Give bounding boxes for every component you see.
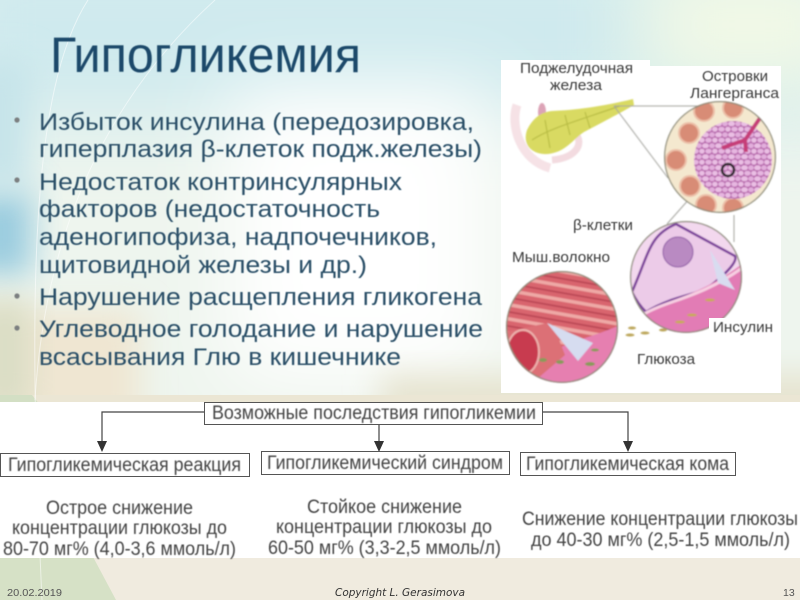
box: heading: Возможные последствия гипогликемии	[212, 403, 536, 424]
bullet 4	[39, 316, 483, 371]
image labels	[512, 61, 780, 368]
footer copyright: Copyright L. Gerasimova	[335, 586, 465, 599]
bullet 2: аденогипофиза, надпочечников,	[39, 224, 437, 251]
bullet markers	[14, 117, 20, 331]
text: persistent decrease: Стойкое снижение	[307, 497, 462, 518]
image labels: Островки	[702, 69, 768, 85]
image labels: β-клетки	[573, 218, 633, 234]
image labels: Поджелудочная	[520, 61, 633, 77]
bullet 1: гиперплазия β-клеток подж.железы)	[39, 136, 482, 163]
connector lines	[614, 106, 734, 242]
label: insulin background	[709, 318, 777, 338]
bullet 2	[39, 169, 437, 279]
text: persistent decrease: концентрации глюкозы до	[276, 517, 492, 538]
text: glucose decrease: до 40-30 мг% (2,5-1,5 ммоль/л)	[531, 530, 790, 551]
footer page number: 13	[783, 587, 795, 599]
bullet 2: факторов (недостаточность	[39, 196, 380, 223]
image labels: Инсулин	[713, 320, 773, 336]
bullet 3: Нарушение расщепления гликогена	[39, 284, 482, 311]
text: acute decrease: Острое снижение	[46, 498, 193, 519]
arrows	[102, 412, 628, 441]
text: acute decrease	[3, 498, 236, 560]
title: Гипогликемия	[50, 27, 361, 83]
circle: islets of Langerhans	[664, 98, 776, 218]
footer date: 20.02.2019	[7, 587, 62, 599]
glucose particles	[626, 326, 667, 336]
text: persistent decrease	[268, 497, 501, 559]
text: persistent decrease: 60-50 мг% (3,3-2,5 ммоль/л)	[268, 538, 501, 559]
bullet 1	[39, 109, 482, 163]
text: acute decrease: 80-70 мг% (4,0-3,6 ммоль/л)	[3, 539, 236, 560]
image labels: Лангерганса	[690, 86, 780, 102]
box: syndrome: Гипогликемический синдром	[267, 453, 503, 474]
bullet 2: Недостаток контринсулярных	[39, 169, 402, 196]
box: coma: Гипогликемическая кома	[526, 454, 729, 475]
image labels: Мыш.волокно	[512, 250, 610, 266]
diagram background	[0, 402, 800, 558]
image labels: Глюкоза	[637, 352, 696, 368]
image background	[501, 60, 781, 393]
image labels: железа	[550, 78, 603, 94]
panel: consequences flow diagram	[0, 402, 800, 560]
icon: pancreas	[515, 99, 634, 168]
circle: beta cell	[630, 221, 742, 340]
panel: pancreas illustration	[501, 60, 781, 393]
bullet 2: щитовидной железы и др.)	[39, 252, 367, 279]
bullet list	[14, 109, 483, 371]
text: glucose decrease	[522, 509, 798, 551]
bullet 4: Углеводное голодание и нарушение	[39, 316, 483, 343]
bullet 1: Избыток инсулина (передозировка,	[39, 109, 474, 136]
footer	[7, 586, 795, 599]
bullet 4: всасывания Глю в кишечнике	[39, 344, 401, 371]
circle: muscle fiber	[506, 271, 620, 385]
box: reaction: Гипогликемическая реакция	[8, 455, 241, 476]
text: acute decrease: концентрации глюкозы до	[12, 518, 227, 539]
